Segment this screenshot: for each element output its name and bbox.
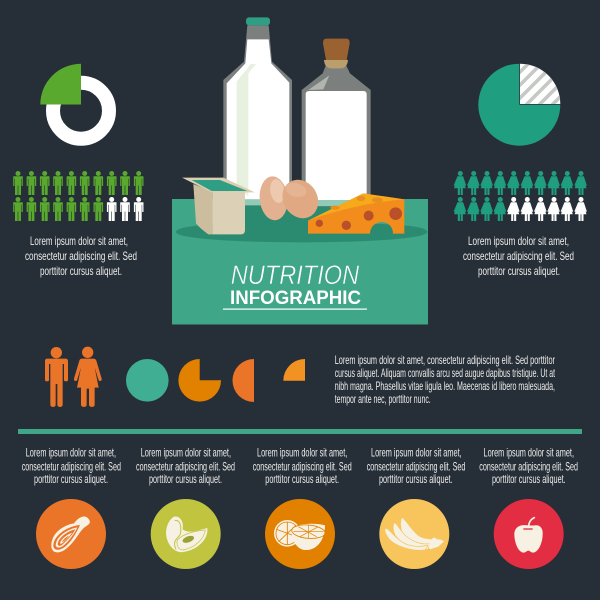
panel: fruit columns <box>22 446 578 569</box>
text block: paragraph: tempor ante nec, porttitor nunc. <box>335 392 431 406</box>
text block: left statistic <box>25 234 137 278</box>
icon: orange slices <box>265 499 335 569</box>
divider bar <box>18 429 582 434</box>
donut chart with green quarter <box>40 64 109 139</box>
icon: apple <box>494 499 564 569</box>
pictogram: men row 1 <box>13 171 144 195</box>
icon: cheese wedge <box>308 193 404 234</box>
half pie <box>232 359 254 402</box>
icon: papaya <box>36 499 106 569</box>
title <box>223 260 367 310</box>
panel: left statistic <box>13 64 144 278</box>
text block: column 2: Lorem ipsum dolor sit amet, <box>141 446 231 460</box>
panel: central dairy illustration and title <box>172 17 428 325</box>
text block: column 5 <box>479 446 578 486</box>
text block: column 3 <box>253 446 352 486</box>
text block: column 1: porttitor cursus aliquet. <box>34 472 108 486</box>
text block: left statistic: consectetur adipiscing elit. Sed <box>25 249 137 263</box>
icon: milk bottle <box>223 17 292 205</box>
food illustration <box>176 17 427 242</box>
pictogram: women row 1 <box>454 171 587 195</box>
panel: population and proportion row <box>45 347 555 407</box>
quarter pie <box>283 359 305 381</box>
text block: column 4: consectetur adipiscing elit. Sed <box>367 459 465 473</box>
text block: left statistic: Lorem ipsum dolor sit amet, <box>30 234 128 248</box>
icon: yogurt cup <box>182 178 255 234</box>
text block: column 4: Lorem ipsum dolor sit amet, <box>371 446 462 460</box>
icon: bananas <box>379 499 449 569</box>
icon: man <box>45 347 68 407</box>
text block: right statistic: porttitor cursus aliquet. <box>478 264 560 278</box>
text block: column 1 <box>22 446 121 486</box>
text block: column 3: porttitor cursus aliquet. <box>265 472 339 486</box>
text block: left statistic: porttitor cursus aliquet. <box>40 264 122 278</box>
text block: column 3: Lorem ipsum dolor sit amet, <box>257 446 347 460</box>
title: INFOGRAPHIC <box>230 288 361 309</box>
icon: eggs <box>258 173 325 225</box>
text block: column 2: porttitor cursus aliquet. <box>149 472 222 486</box>
icon: cork bottle <box>302 39 371 207</box>
pictogram: men row 2 <box>13 197 144 221</box>
panel: right statistic <box>454 57 587 278</box>
text block: column 1: consectetur adipiscing elit. Sed <box>22 459 121 473</box>
pictogram: women row 2 <box>454 197 587 221</box>
pie chart with hatched quarter <box>478 64 560 146</box>
icon: woman <box>74 347 102 407</box>
three-quarter pie <box>178 359 221 402</box>
text block: column 4 <box>367 446 465 486</box>
text block: column 3: consectetur adipiscing elit. Sed <box>253 459 352 473</box>
title: NUTRITION <box>231 260 360 290</box>
table shadow <box>176 205 427 242</box>
text block: right statistic <box>463 234 574 278</box>
icon: avocado <box>151 499 221 569</box>
text block: column 2: consectetur adipiscing elit. Sed <box>136 459 235 473</box>
whole circle <box>126 359 169 402</box>
text block: paragraph <box>335 353 555 406</box>
text block: column 1: Lorem ipsum dolor sit amet, <box>26 446 116 460</box>
text block: column 4: porttitor cursus aliquet. <box>379 472 453 486</box>
text block: column 2 <box>136 446 235 486</box>
green table panel <box>172 199 428 324</box>
